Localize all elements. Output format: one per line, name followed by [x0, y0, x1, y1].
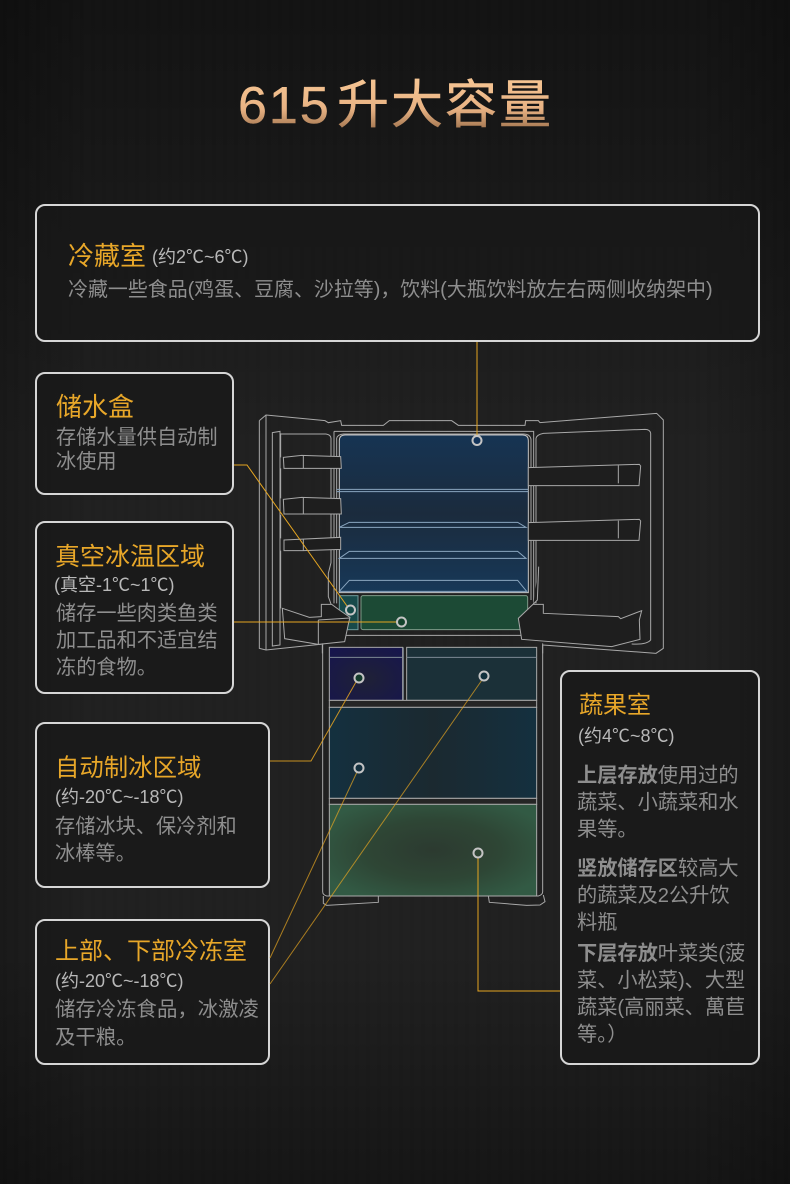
temperature: freezer: (约-20℃~-18℃) — [55, 971, 184, 991]
description: upper layer: 上层存放使用过的 — [577, 765, 739, 787]
upper fridge section — [259, 413, 663, 653]
title: 615 — [238, 77, 331, 135]
description: auto ice: 存储冰块、保冷剂和 — [55, 816, 237, 838]
heading: refrigerator: 冷藏室 — [68, 241, 146, 271]
fridge compartment fill — [339, 435, 528, 593]
lower freezer drawer — [329, 707, 537, 798]
cabinet lower outline — [323, 643, 543, 896]
title: 升大容量 — [337, 77, 553, 135]
leader lines — [234, 342, 560, 991]
heading: freezer: 上部、下部冷冻室 — [55, 938, 247, 965]
temperature: vacuum zone: (真空-1℃~1℃) — [54, 575, 175, 595]
lower fridge section — [323, 643, 545, 905]
description: vertical storage: 的蔬菜及2公升饮 — [577, 885, 730, 907]
description: lower layer — [577, 942, 745, 1046]
description: water box: 冰使用 — [56, 451, 117, 473]
description: vacuum zone: 冻的食物。 — [56, 657, 157, 679]
right door shelves — [528, 464, 641, 486]
description: upper layer — [577, 764, 739, 841]
heading: vegetables: 蔬果室 — [579, 692, 651, 719]
heading: vacuum zone: 真空冰温区域 — [55, 543, 205, 571]
description: freezer — [55, 998, 259, 1049]
description: vertical storage: 料瓶 — [577, 912, 617, 934]
description: vacuum zone: 储存一些肉类鱼类 — [56, 603, 218, 625]
temperature: refrigerator: (约2℃~6℃) — [152, 247, 249, 267]
small left freezer drawer — [329, 647, 403, 700]
panel: water storage box — [35, 372, 234, 495]
temperature: vegetables: (约4℃~8℃) — [578, 726, 675, 746]
description: vacuum zone: 加工品和不适宜结 — [56, 630, 218, 652]
description: refrigerator: 冷藏一些食品(鸡蛋、豆腐、沙拉等)，饮料(大瓶饮料放左右两侧收纳架中) — [68, 279, 713, 301]
left door shelves — [283, 455, 341, 468]
cabinet outline — [259, 413, 663, 653]
description: auto ice — [55, 816, 237, 865]
panel: fruit and vegetable compartment — [560, 670, 760, 1065]
left foot — [323, 896, 378, 905]
title — [238, 77, 553, 135]
right upper freezer drawer — [407, 647, 537, 700]
vegetable drawer — [329, 804, 537, 896]
marker dots — [346, 436, 488, 858]
drawer rail one — [329, 700, 537, 707]
right door bin — [518, 567, 642, 647]
heading: auto ice: 自动制冰区域 — [55, 755, 201, 782]
heading: water box: 储水盒 — [56, 392, 134, 422]
description: vertical storage: 竖放储存区较高大 — [577, 858, 739, 880]
description: lower layer: 菜、小松菜)、大型 — [577, 970, 745, 992]
description: upper layer: 果等。 — [577, 819, 638, 841]
right foot — [488, 895, 545, 905]
panel: upper and lower freezer — [35, 919, 270, 1065]
vacuum zone fill — [361, 596, 528, 630]
description: water box: 存储水量供自动制 — [56, 427, 218, 449]
description: lower layer: 蔬菜(高丽菜、萬苣 — [577, 997, 745, 1019]
description: vacuum zone — [56, 602, 218, 679]
left door bin — [282, 604, 350, 644]
panel: refrigerator compartment — [35, 204, 760, 342]
description: auto ice: 冰棒等。 — [55, 843, 136, 865]
left door inner — [272, 431, 280, 646]
description: vertical storage — [577, 857, 739, 934]
panel: vacuum ice zone — [35, 521, 234, 694]
drawer rail two — [329, 798, 537, 804]
right door inner — [536, 429, 651, 644]
description: lower layer: 等。） — [577, 1024, 627, 1046]
description: freezer: 储存冷冻食品，冰激凌 — [55, 999, 259, 1021]
description: lower layer: 下层存放叶菜类(菠 — [577, 943, 745, 965]
description: upper layer: 蔬菜、小蔬菜和水 — [577, 792, 739, 814]
temperature: auto ice: (约-20℃~-18℃) — [55, 787, 184, 807]
water box fill — [339, 596, 358, 630]
description: freezer: 及干粮。 — [55, 1027, 137, 1049]
shelves — [337, 489, 528, 591]
description: water box — [56, 426, 218, 473]
panel: auto ice zone — [35, 722, 270, 888]
